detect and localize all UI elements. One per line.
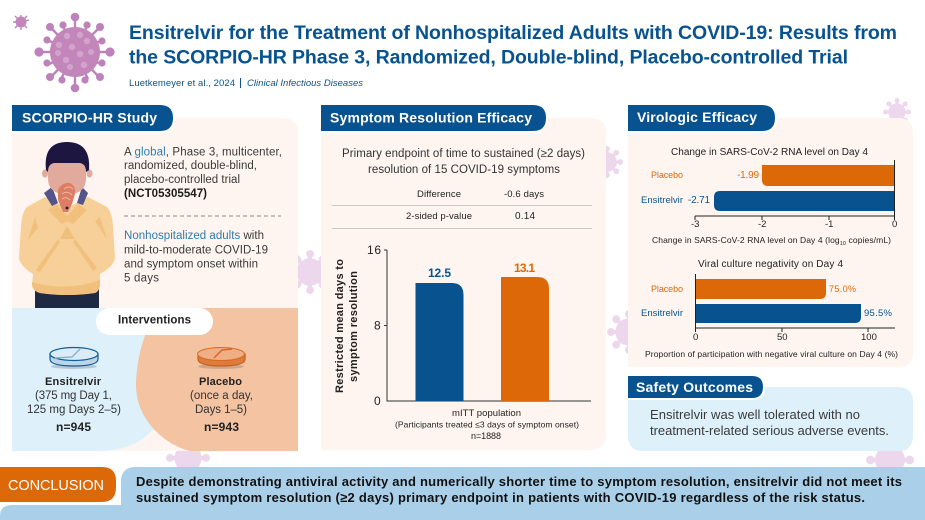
chart: SARS-CoV-2 RNA change: Change in SARS-CoV-2 RNA level on Day 4 xyxy=(671,147,868,158)
chart: SARS-CoV-2 RNA change: Placebo xyxy=(651,170,683,180)
icon: large virus xyxy=(34,13,115,92)
chart: SARS-CoV-2 RNA change: 10 xyxy=(840,241,846,247)
chart: SARS-CoV-2 RNA change: Ensitrelvir xyxy=(641,195,683,206)
text: population: Nonhospitalized adults with xyxy=(124,230,264,242)
chart: SARS-CoV-2 RNA change xyxy=(641,147,897,247)
citation: Clinical Infectious Diseases xyxy=(247,78,363,89)
icon: small virus xyxy=(13,15,29,30)
x axis label xyxy=(395,408,579,441)
heading: Interventions xyxy=(96,308,213,335)
chart: viral culture negativity: 100 xyxy=(861,332,877,343)
chart: viral culture negativity: 50 xyxy=(777,332,788,343)
chart: viral culture negativity: Viral culture negativity on Day 4 xyxy=(698,259,843,270)
text: safety result: treatment-related serious adverse events. xyxy=(650,423,889,438)
section header: SCORPIO-HR Study xyxy=(10,103,173,133)
chart: SARS-CoV-2 RNA change: copies/mL) xyxy=(846,235,891,245)
table: difference and p-value xyxy=(332,189,592,228)
text: safety result xyxy=(650,407,889,438)
text: population xyxy=(124,230,268,284)
text: Ensitrelvir arm: Ensitrelvir xyxy=(45,376,102,388)
chart: SARS-CoV-2 RNA change: 0 xyxy=(892,219,897,230)
text: safety result: Ensitrelvir was well tolerated with no xyxy=(650,407,860,422)
citation xyxy=(129,78,363,89)
text: Ensitrelvir arm: n=945 xyxy=(56,420,91,434)
callout: conclusion xyxy=(0,467,925,520)
y axis title: Restricted mean days to xyxy=(334,259,346,393)
panel: interventions xyxy=(12,308,298,451)
text: trial design xyxy=(124,146,282,200)
chart: viral culture negativity xyxy=(641,259,898,359)
table: difference and p-value: Difference xyxy=(417,189,461,200)
text: Placebo arm: n=943 xyxy=(204,420,239,434)
bar chart: restricted mean days xyxy=(334,243,591,441)
panel: Virologic Efficacy xyxy=(626,103,913,367)
title: the SCORPIO-HR Phase 3, Randomized, Double-blind, Placebo-controlled Trial xyxy=(129,46,848,68)
title xyxy=(129,22,897,68)
text: Ensitrelvir arm: (375 mg Day 1, xyxy=(35,390,112,402)
heading: Interventions: Interventions xyxy=(118,314,191,326)
chart: viral culture negativity: Placebo xyxy=(651,284,683,294)
text: primary endpoint xyxy=(342,148,585,176)
chart: SARS-CoV-2 RNA change: -1 xyxy=(825,219,833,230)
text: conclusion statement: sustained symptom resolution (≥2 days) primary endpoint in patients with COVID-19 regardless of the risk status. xyxy=(136,490,865,505)
table: difference and p-value: -0.6 days xyxy=(504,189,544,200)
table: difference and p-value: 0.14 xyxy=(515,211,535,222)
bar: ensitrelvir 12.5: 12.5 xyxy=(428,266,451,280)
bar: placebo 13.1 xyxy=(501,261,549,401)
x axis label: n=1888 xyxy=(471,431,501,441)
text: Placebo arm: Placebo xyxy=(199,376,242,388)
label: CONCLUSION: CONCLUSION xyxy=(8,478,104,494)
text: conclusion statement: Despite demonstrating antiviral activity and numerically shorter time to symptom resolution, ensitrelvir did not meet its xyxy=(136,474,902,489)
text: primary endpoint: resolution of 15 COVID-19 symptoms xyxy=(368,164,560,176)
text: population: 5 days xyxy=(124,272,159,284)
chart: SARS-CoV-2 RNA change: -2 xyxy=(758,219,766,230)
chart: viral culture negativity: 75.0% xyxy=(829,284,856,294)
section header: Virologic Efficacy xyxy=(626,103,775,133)
chart: SARS-CoV-2 RNA change: -3 xyxy=(691,219,699,230)
text: trial design: placebo-controlled trial xyxy=(124,174,240,186)
text: trial design: randomized, double-blind, xyxy=(124,160,257,172)
section header: Safety Outcomes: Safety Outcomes xyxy=(636,379,753,395)
chart: viral culture negativity: 95.5% xyxy=(864,308,893,319)
x axis label: mITT population xyxy=(452,408,521,419)
text: Placebo arm: Days 1–5) xyxy=(195,404,247,416)
illustration: coughing person xyxy=(19,142,115,308)
section header: SCORPIO-HR Study: SCORPIO-HR Study xyxy=(22,110,157,126)
chart: viral culture negativity: Proportion of participation with negative viral culture on Day 4 (%) xyxy=(645,349,898,359)
text: trial design: (NCT05305547) xyxy=(124,188,207,200)
y axis labels: 16 xyxy=(367,243,381,257)
y axis title: symptom resolution xyxy=(348,271,360,382)
label: CONCLUSION xyxy=(0,467,116,502)
x axis label: (Participants treated ≤3 days of symptom onset) xyxy=(395,420,579,430)
panel: SCORPIO-HR Study xyxy=(10,103,298,451)
bar: placebo 13.1: 13.1 xyxy=(514,261,535,275)
text: population: mild-to-moderate COVID-19 xyxy=(124,244,268,256)
text: Ensitrelvir arm: 125 mg Days 2–5) xyxy=(27,404,121,416)
text: conclusion statement xyxy=(136,474,902,505)
text: population: and symptom onset within xyxy=(124,258,258,270)
section header: Symptom Resolution Efficacy: Symptom Resolution Efficacy xyxy=(330,110,532,126)
y axis labels: 0 xyxy=(374,394,381,408)
chart: SARS-CoV-2 RNA change: -2.71 xyxy=(688,195,710,206)
text: primary endpoint: Primary endpoint of time to sustained (≥2 days) xyxy=(342,148,585,160)
icon: placebo tablet xyxy=(198,348,245,369)
panel: Symptom Resolution Efficacy xyxy=(319,103,606,450)
text: trial design: A global, Phase 3, multicenter, xyxy=(124,146,282,158)
section header: Virologic Efficacy: Virologic Efficacy xyxy=(637,109,757,125)
y axis labels: 8 xyxy=(374,318,381,332)
text: Ensitrelvir arm xyxy=(27,376,121,434)
icon: ensitrelvir tablet xyxy=(50,348,98,369)
section header: Symptom Resolution Efficacy xyxy=(319,103,546,133)
section header: Safety Outcomes xyxy=(626,374,763,400)
chart: viral culture negativity: 0 xyxy=(693,332,698,343)
text: Placebo arm: (once a day, xyxy=(190,390,253,402)
chart: viral culture negativity: Ensitrelvir xyxy=(641,308,683,319)
title: Ensitrelvir for the Treatment of Nonhospitalized Adults with COVID-19: Results from xyxy=(129,22,897,44)
table: difference and p-value: 2-sided p-value xyxy=(406,211,472,222)
text: Placebo arm xyxy=(190,376,253,434)
panel: Safety Outcomes xyxy=(626,374,913,451)
chart: SARS-CoV-2 RNA change: -1.99 xyxy=(737,170,759,181)
y axis title xyxy=(334,259,360,393)
chart: SARS-CoV-2 RNA change: Change in SARS-CoV-2 RNA level on Day 4 (log xyxy=(652,235,840,245)
y axis labels xyxy=(367,243,381,408)
bar: ensitrelvir 12.5 xyxy=(416,266,464,401)
citation: Luetkemeyer et al., 2024 xyxy=(129,78,235,89)
